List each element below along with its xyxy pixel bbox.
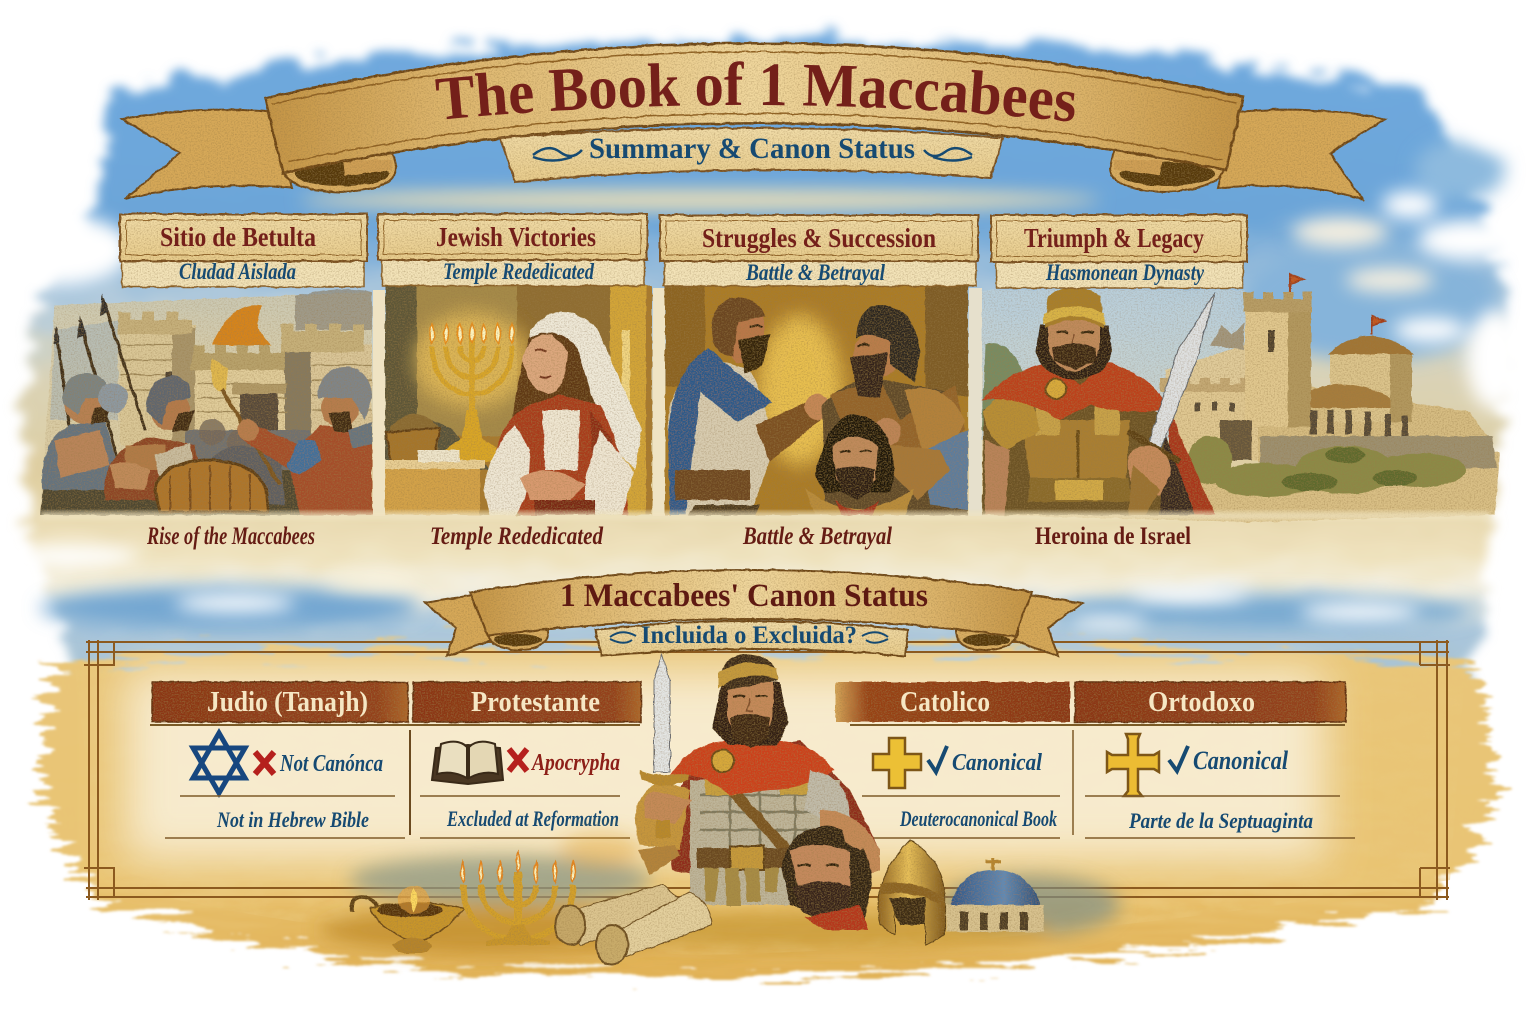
faith column: Protestant: Apocrypha <box>530 750 620 776</box>
scene: castle, landscape and warrior with sword <box>982 274 1500 522</box>
panel headers <box>120 214 1247 288</box>
icon: menorah <box>461 852 575 945</box>
header: Sitio de Betulta: Sitio de Betulta <box>160 222 316 252</box>
icon: ornate gold cross <box>1107 734 1159 796</box>
icon: oil lamp <box>352 886 465 953</box>
faith column: Judaism <box>150 682 640 838</box>
lower banner: canon status <box>425 570 1082 656</box>
banner heading: 1 Maccabees' Canon Status <box>560 578 928 614</box>
panel: Triumph & Legacy <box>40 274 1500 522</box>
panel: canon status table <box>84 640 1450 900</box>
main title banner <box>119 41 1388 202</box>
severed head <box>782 826 872 930</box>
header: Jewish Victories <box>378 214 647 286</box>
faith column: Protestant: Excluded at Reformation <box>446 806 619 831</box>
icon: check mark <box>928 746 947 772</box>
header: Struggles & Succession <box>660 215 978 286</box>
header: Struggles & Succession: Battle & Betrayal <box>745 260 886 285</box>
ground haze behind objects <box>320 832 1120 954</box>
faith column: Orthodox <box>1073 682 1355 838</box>
faith column: Protestant <box>410 682 641 838</box>
header: Jewish Victories: Temple Rededicated <box>443 259 594 284</box>
panel: Struggles & Succession <box>665 286 968 515</box>
panel captions <box>146 523 1191 550</box>
double frame with corner squares <box>84 640 1450 900</box>
faith column: Catholic <box>835 682 1345 838</box>
faith column: Judaism: Not in Hebrew Bible <box>216 807 369 832</box>
subtitle plaque <box>500 128 1003 182</box>
icon: red X <box>255 752 274 774</box>
central warrior with sword <box>636 654 880 906</box>
bottom objects and central warrior <box>320 654 1120 965</box>
subtitle plaque: Summary & Canon Status <box>589 132 915 165</box>
header: Jewish Victories: Jewish Victories <box>436 222 596 252</box>
panel captions: Rise of the Maccabees <box>146 523 315 550</box>
panel captions: Heroina de Israel <box>1035 523 1191 550</box>
title: The Book of 1 Maccabees <box>435 61 1074 122</box>
icon: domed church <box>946 858 1044 932</box>
header: Struggles & Succession: Struggles & Succession <box>702 223 936 253</box>
header: Sitio de Betulta <box>120 214 367 287</box>
faith column: Judaism: Judio (Tanajh) <box>207 687 368 718</box>
faith column: Orthodox: Canonical <box>1193 746 1289 775</box>
panel: Sitio de Betulta <box>40 289 372 515</box>
ground haze under the panels <box>40 512 1490 520</box>
faith column: Catholic: Canonical <box>952 750 1042 776</box>
faith column: Judaism: Not Canónca <box>279 751 383 777</box>
icon: check mark <box>1169 746 1188 771</box>
icon: gold cross <box>873 738 921 788</box>
panel: Jewish Victories <box>385 286 652 515</box>
faith column: Protestant: Protestante <box>471 687 600 718</box>
main ribbon <box>265 43 1243 173</box>
panel captions: Temple Rededicated <box>430 523 603 550</box>
icon: scrolls <box>555 884 712 965</box>
faith column: Catholic: Deuterocanonical Book <box>899 806 1057 831</box>
header: Triumph & Legacy: Hasmonean Dynasty <box>1045 260 1205 285</box>
header: Triumph & Legacy <box>991 215 1247 288</box>
scene: siege of the walled city <box>40 289 372 515</box>
faith column: Catholic: Catolico <box>900 687 990 718</box>
header: Sitio de Betulta: Cludad Aislada <box>179 259 296 284</box>
banner subheading: Incluida o Excluida? <box>641 622 857 649</box>
icon: red X <box>509 749 527 771</box>
header: Triumph & Legacy: Triumph & Legacy <box>1024 223 1204 253</box>
faith column: Orthodox: Parte de la Septuaginta <box>1128 808 1313 833</box>
panel captions: Battle & Betrayal <box>742 523 892 550</box>
scene: temple, menorah and woman <box>385 286 652 515</box>
icon: open book <box>432 742 503 784</box>
faith column: Orthodox: Ortodoxo <box>1148 687 1255 718</box>
icon: star of David <box>193 733 245 793</box>
scene: two men and severed head <box>665 286 968 515</box>
icon: helmet <box>878 840 945 945</box>
ribbon tails and curls <box>122 110 1385 199</box>
